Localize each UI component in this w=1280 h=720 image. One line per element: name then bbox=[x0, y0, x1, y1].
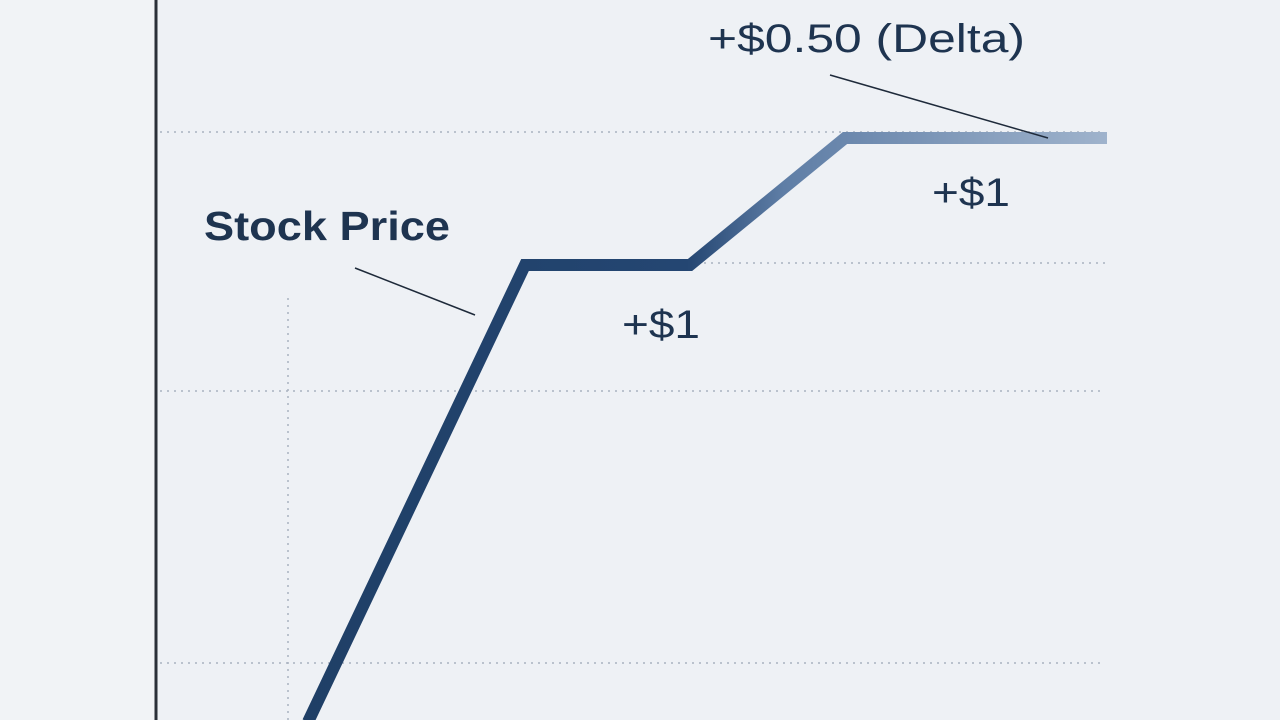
label: delta: +$0.50 (Delta) bbox=[708, 17, 1025, 61]
label: stock price bbox=[204, 203, 475, 315]
label: +$1 middle: +$1 bbox=[622, 303, 700, 347]
label: delta bbox=[708, 17, 1048, 138]
label: +$1 right: +$1 bbox=[932, 171, 1010, 215]
label: stock price: Stock Price bbox=[204, 203, 450, 249]
y axis bbox=[154, 0, 158, 720]
price line bbox=[308, 138, 1107, 720]
